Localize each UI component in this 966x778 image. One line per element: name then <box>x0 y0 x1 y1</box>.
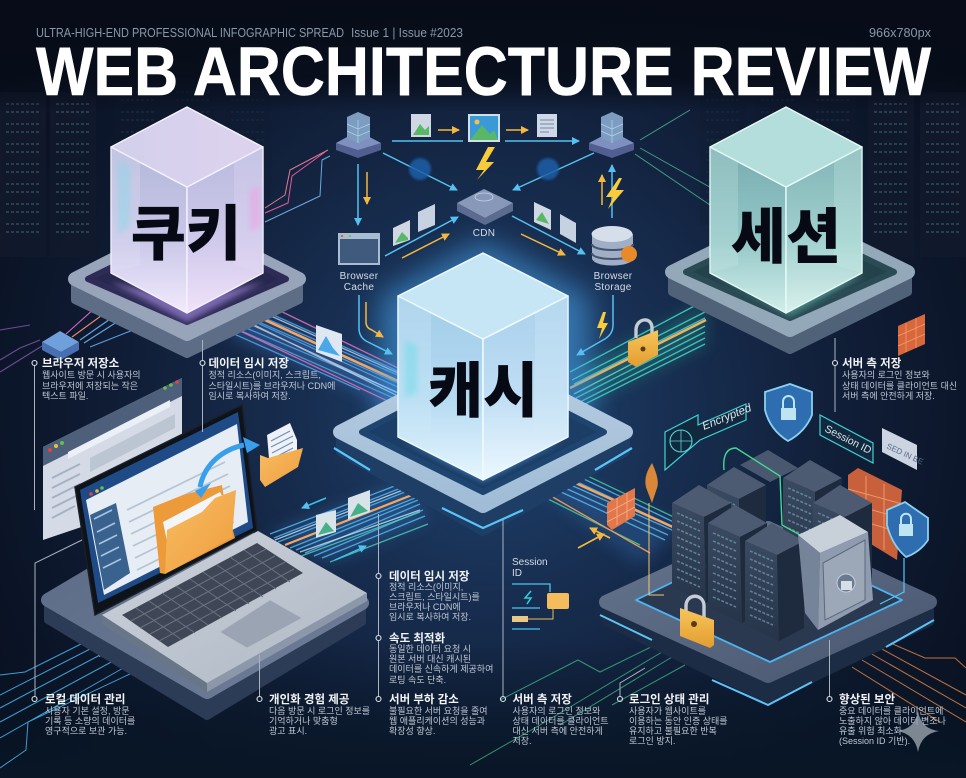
callout: local data management: 사용자 기본 설정, 방문 <box>45 706 130 716</box>
icons: files near browser cache <box>393 204 435 246</box>
dimensions note: 966x780px <box>869 25 931 40</box>
callout: login state management: 유지하고 불필요한 반복 <box>629 725 717 736</box>
subtitle kicker: ULTRA-HIGH-END PROFESSIONAL INFOGRAPHIC SPREAD <box>36 25 344 40</box>
icon: lightning cache link <box>597 312 608 339</box>
icon: sparkle watermark <box>897 711 939 752</box>
icon: origin server left <box>336 112 381 158</box>
issue number: Issue 1 | Issue #2023 <box>351 25 463 40</box>
laptop base <box>102 531 367 692</box>
folder on screen <box>153 485 236 574</box>
icon: lightning storage <box>606 178 624 209</box>
callout: data temp storage center: 정적 리소스(이미지, <box>389 581 463 592</box>
label: browser cache: Browser <box>340 271 379 282</box>
icon: CDN box <box>457 189 513 225</box>
callout: browser storage: 텍스트 파일. <box>42 391 88 401</box>
callout: speed optimisation <box>376 631 493 685</box>
label: CDN: CDN <box>473 228 495 239</box>
icons: files near browser storage <box>534 202 576 243</box>
callout: personalised experience <box>257 655 370 736</box>
callout: data temp storage center: 데이터 임시 저장 <box>389 569 470 583</box>
background server racks right <box>700 60 966 257</box>
label: browser storage: Storage <box>594 282 632 293</box>
callout: speed optimisation: 속도 최적화 <box>389 631 446 645</box>
callout: server side storage bottom: 대신 서버 측에 안전하게 <box>512 726 603 736</box>
flow arrows blue <box>358 141 613 355</box>
cube label: session: 세션 <box>731 189 841 276</box>
session id mini diagram <box>512 528 610 629</box>
callout: login state management: 로그인 방지. <box>629 736 675 746</box>
callout: enhanced security <box>827 640 946 746</box>
callout: server side storage top: 상태 데이터를 클라이언트 대신 <box>842 380 957 391</box>
panel: cache cube <box>334 240 632 532</box>
callout: speed optimisation: 데이터를 신속하게 제공하여 <box>389 663 493 674</box>
callout: personalised experience: 다음 방문 시 로그인 정보를 <box>269 706 370 716</box>
circuit lines cookie platform to chip <box>0 308 138 372</box>
icon: shield right <box>887 502 928 557</box>
callout: speed optimisation: 원본 서버 대신 캐시된 <box>389 653 471 664</box>
circuit lines bottom-center <box>470 645 685 765</box>
icon: gold block <box>547 593 569 609</box>
callout: browser storage <box>32 356 141 510</box>
icon: padlock on session stream <box>628 320 658 367</box>
icon: image card on cookie stream <box>316 325 342 362</box>
cube label: cache: 캐시 <box>428 343 538 430</box>
icon: browser storage database <box>592 226 637 266</box>
callout: local data management: 기록 등 소량의 데이터를 <box>45 715 135 726</box>
trackpad <box>220 600 302 648</box>
callout: enhanced security: 중요 데이터를 클라이언트에 <box>839 705 943 716</box>
cube: cookie <box>111 107 263 313</box>
cube: session <box>710 107 862 313</box>
tag: small sign: SED IN BE <box>885 442 925 467</box>
callout: personalised experience: 기억하거나 맞춤형 <box>269 715 338 726</box>
icon: origin server right <box>589 112 634 158</box>
callout: enhanced security: 향상된 보안 <box>839 692 896 706</box>
icon: document <box>537 114 557 137</box>
stream: cache to session <box>570 303 706 404</box>
callout: server load reduction: 서버 부하 감소 <box>389 693 459 706</box>
title header <box>36 25 932 110</box>
icon: small folder with document <box>260 423 303 487</box>
callout: server side storage bottom <box>500 520 609 746</box>
server racks <box>672 450 872 641</box>
callout: server load reduction <box>376 693 488 736</box>
tag: encrypted: Encrypted <box>701 402 754 433</box>
callout: login state management: 이용하는 동안 인증 상태를 <box>629 716 728 726</box>
icon: chip near cookie <box>42 331 79 360</box>
browser window behind laptop <box>43 378 182 540</box>
label: session id: ID <box>512 568 522 579</box>
stream: laptop to cache <box>268 482 428 562</box>
icon: small image file <box>411 114 431 137</box>
label: browser storage: Browser <box>594 271 633 282</box>
callout: local data management: 로컬 데이터 관리 <box>45 692 125 706</box>
callout: data temp storage top: 임시로 복사하여 저장. <box>208 390 291 401</box>
icon: lightning top <box>476 147 495 180</box>
circuit lines bottom-right <box>852 642 966 722</box>
callout: server side storage top <box>832 338 957 412</box>
icon: firewall left <box>607 488 635 530</box>
callout: server load reduction: 웹 애플리케이션의 성능과 <box>389 716 485 726</box>
tag: session id: Session ID <box>823 423 874 457</box>
session flow lines <box>512 584 550 629</box>
platform: cookie <box>75 222 299 354</box>
icon: firewall top right <box>898 314 925 356</box>
callout: login state management <box>618 668 728 746</box>
yellow link line <box>649 503 664 595</box>
callout: data temp storage top: 정적 리소스(이미지, 스크립트, <box>208 369 321 380</box>
callout: personalised experience: 개인화 경험 제공 <box>269 692 350 706</box>
callout: personalised experience: 광고 표시. <box>269 725 307 736</box>
callout: data temp storage center: 임시로 복사하여 저장. <box>389 611 471 622</box>
arrows: yellow to server <box>578 528 610 548</box>
keyboard keys <box>131 549 294 641</box>
panel: session cube <box>672 107 908 350</box>
stream: cache to server <box>540 470 680 565</box>
callout: server side storage bottom: 상태 데이터를 클라이언트 <box>512 715 609 726</box>
callout: local data management: 영구적으로 보관 가능. <box>45 725 127 736</box>
callout: browser storage: 브라우저에 저장되는 작은 <box>42 381 138 391</box>
safe <box>798 515 873 630</box>
platform: laptop <box>48 510 362 716</box>
callout: login state management: 사용자가 웹사이트를 <box>629 706 706 716</box>
label: session id: Session <box>512 557 548 568</box>
cube: cache <box>398 253 568 480</box>
icon: lightning mini <box>525 591 531 604</box>
callout: data temp storage center <box>376 514 480 696</box>
green network link <box>724 448 800 535</box>
callout: data temp storage top: 데이터 임시 저장 <box>208 356 289 370</box>
callout: browser storage: 브라우저 저장소 <box>42 356 120 370</box>
CDN flow diagram <box>336 112 637 355</box>
cache glow <box>380 240 590 500</box>
circuit lines session to server <box>635 110 715 205</box>
label: browser cache: Cache <box>344 282 374 293</box>
icon: browser cache window <box>338 233 380 265</box>
cyan shield link <box>880 558 904 604</box>
platform: session <box>672 214 908 350</box>
panel: secure server cluster <box>600 384 934 705</box>
callout: speed optimisation: 로팅 속도 단축. <box>389 675 446 685</box>
panel: laptop <box>43 378 370 716</box>
callout: browser storage: 웹사이트 방문 시 사용자의 <box>42 370 141 380</box>
flow arrows yellow <box>366 130 602 337</box>
panel: cookie cube <box>75 107 299 354</box>
callout: speed optimisation: 동일한 데이터 요청 시 <box>389 644 471 654</box>
icon: flow globe left <box>409 158 431 180</box>
callout: data temp storage center: 스크립트, 스타일시트)를 <box>389 592 480 602</box>
stream: cookie to cache <box>225 305 400 410</box>
callout: login state management: 로그인 상태 관리 <box>629 692 709 706</box>
callout: enhanced security: 유출 위험 최소화 <box>839 726 902 736</box>
circuit lines cookie to server <box>265 150 330 222</box>
callout: enhanced security: (Session ID 기반). <box>839 736 910 746</box>
callout: server side storage top: 서버 측에 안전하게 저장. <box>842 391 935 401</box>
tag: session id <box>820 415 874 463</box>
icon: large image <box>468 114 500 142</box>
icon: key block <box>512 609 553 622</box>
callout: server side storage top: 서버 측 저장 <box>842 356 902 370</box>
icons: image cards on stream <box>316 490 370 538</box>
callout: local data management <box>32 540 135 736</box>
icon: firewall right <box>848 468 902 560</box>
arrow: blue curved sync <box>195 437 260 498</box>
icon: shield top <box>765 384 812 441</box>
arrows: stream direction left <box>302 498 366 560</box>
callout: data temp storage top: 스타일시트)를 브라우저나 CDN에 <box>208 381 335 391</box>
callout: server side storage top: 사용자의 로그인 정보와 <box>842 369 930 380</box>
icon: gold padlock <box>680 596 714 648</box>
callout: enhanced security: 노출하지 않아 데이터 변조나 <box>839 716 946 726</box>
laptop screen <box>75 405 257 615</box>
platform: cache <box>334 358 632 532</box>
callout: server side storage bottom: 사용자의 로그인 정보와 <box>512 705 600 716</box>
callout: data temp storage top <box>200 340 335 432</box>
callout: server side storage bottom: 서버 측 저장 <box>512 692 572 706</box>
tag: small sign <box>882 428 925 470</box>
callout: server load reduction: 확장성 향상. <box>389 725 435 736</box>
keyboard <box>122 543 303 647</box>
tag: encrypted <box>665 402 754 470</box>
icon: flow globe right <box>537 158 559 180</box>
callout: server side storage bottom: 저장. <box>512 736 532 746</box>
background server racks left <box>0 60 271 257</box>
platform: server <box>600 528 934 705</box>
icon: flame <box>645 463 658 503</box>
callout: data temp storage center: 브라우저나 CDN에 <box>389 602 461 612</box>
cube label: cookie: 쿠키 <box>131 186 241 273</box>
circuit lines bottom-left <box>0 640 134 768</box>
callout: server load reduction: 불필요한 서버 요청을 줄여 <box>389 705 488 716</box>
